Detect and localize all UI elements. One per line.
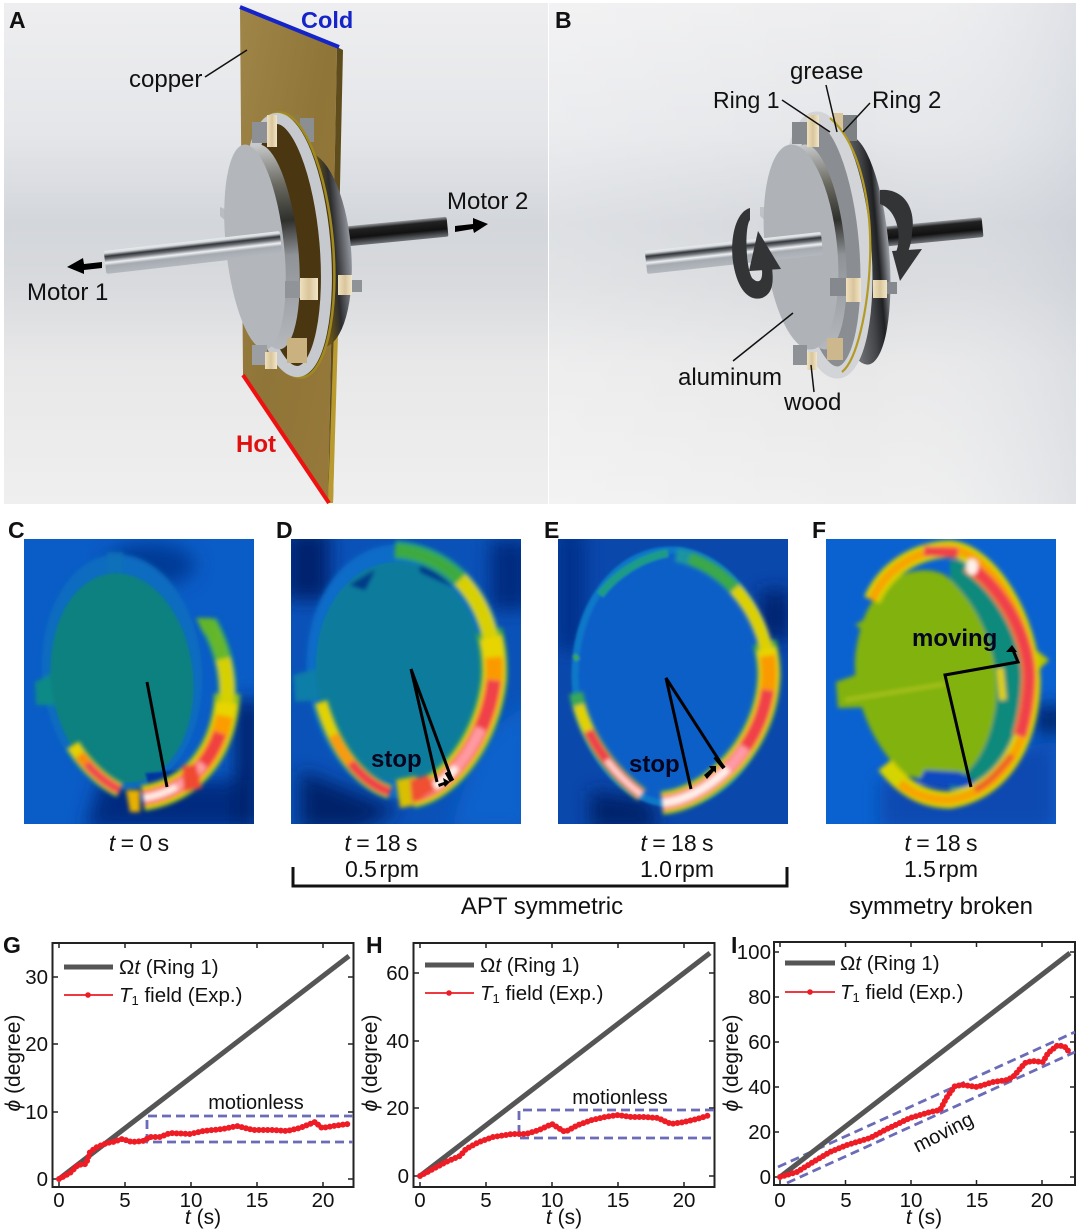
legend xyxy=(785,952,963,1005)
legend: T xyxy=(119,984,133,1007)
legend: Ωt (Ring 1) xyxy=(840,952,940,975)
plot frame and ticks xyxy=(774,942,1075,1185)
x axis tick labels: 5 xyxy=(840,1189,852,1212)
x axis tick labels xyxy=(414,1189,695,1212)
label: Ring 1 xyxy=(713,87,830,132)
angle lines xyxy=(411,669,452,782)
caption D xyxy=(344,830,419,882)
red hot edge xyxy=(243,375,329,503)
x axis tick labels: 20 xyxy=(673,1189,695,1212)
right rotation arrow xyxy=(880,190,922,281)
label: Cold: Cold xyxy=(301,7,353,33)
legend xyxy=(64,956,242,1008)
y axis tick labels xyxy=(25,966,48,1191)
label: Ring 2: Ring 2 xyxy=(872,87,941,114)
shaft to Motor 2 xyxy=(339,217,448,247)
copper plate xyxy=(240,7,343,503)
panel C: thermal image t=0 xyxy=(24,539,260,830)
y axis tick labels: 40 xyxy=(748,1076,771,1099)
ring and disk assembly xyxy=(754,109,899,381)
label: grease xyxy=(790,58,863,132)
ring and disk assembly xyxy=(215,109,362,381)
legend: field (Exp.) xyxy=(860,981,963,1004)
x axis tick labels: 5 xyxy=(119,1189,131,1212)
label: moving: moving xyxy=(910,1108,977,1157)
legend: 1 xyxy=(853,990,860,1005)
label: copper: copper xyxy=(129,66,202,93)
shaft right xyxy=(879,217,983,247)
dashed motionless box xyxy=(147,1116,353,1142)
label: aluminum xyxy=(678,313,793,391)
panel letter C: C xyxy=(8,517,25,543)
plot frame and ticks xyxy=(414,943,714,1187)
label: Hot: Hot xyxy=(236,431,276,458)
arrow to Motor 2 xyxy=(455,218,488,233)
bracket: APT symmetric range xyxy=(293,867,787,886)
shaft left xyxy=(645,232,823,274)
x axis tick labels: 10 xyxy=(900,1189,922,1212)
y axis tick labels: 0 xyxy=(398,1165,409,1188)
x axis tick labels: 0 xyxy=(414,1189,426,1212)
plot frame and ticks xyxy=(52,943,354,1187)
label: symmetry broken: symmetry broken xyxy=(849,893,1033,920)
caption E: 1.0 rpm xyxy=(640,856,714,882)
label: APT symmetric: APT symmetric xyxy=(461,893,623,920)
y axis tick labels xyxy=(386,962,409,1188)
panel letter G: G xyxy=(3,932,21,958)
x axis tick labels: 0 xyxy=(53,1189,65,1212)
x axis tick labels xyxy=(53,1189,334,1212)
label: moving: moving xyxy=(912,625,997,652)
legend: Ωt (Ring 1) xyxy=(480,954,580,977)
arrow to Motor 1 xyxy=(67,258,102,274)
x axis title: t (s) xyxy=(906,1206,942,1229)
angle line xyxy=(147,682,167,787)
legend: Ωt (Ring 1) xyxy=(119,956,219,979)
caption D: t = 18 s xyxy=(344,830,418,856)
y axis tick labels: 30 xyxy=(25,966,48,989)
x axis tick labels: 0 xyxy=(774,1189,786,1212)
x axis tick labels: 15 xyxy=(966,1189,988,1212)
panel B: rotation render xyxy=(549,3,1076,504)
x axis tick labels: 10 xyxy=(180,1189,202,1212)
blue cold edge xyxy=(240,7,339,47)
panel letter F: F xyxy=(812,517,826,543)
panel letter D: D xyxy=(276,517,293,543)
legend: T xyxy=(480,982,494,1005)
caption F: 1.5 rpm xyxy=(904,856,978,882)
panel A: apparatus render xyxy=(4,3,548,504)
x axis title: t (s) xyxy=(185,1206,221,1229)
y axis tick labels: 80 xyxy=(748,986,771,1009)
y axis title: ϕ (degree) xyxy=(2,1015,25,1111)
legend: field (Exp.) xyxy=(500,982,603,1005)
x axis tick labels: 15 xyxy=(246,1189,268,1212)
y axis tick labels: 40 xyxy=(386,1030,409,1053)
panel letter B: B xyxy=(555,7,572,33)
label: aluminum: aluminum xyxy=(678,364,782,391)
y axis tick labels: 60 xyxy=(386,962,409,985)
label: motionless: motionless xyxy=(572,1087,668,1109)
y axis title: ϕ (degree) xyxy=(359,1015,382,1111)
label: Ring 2 xyxy=(843,87,941,132)
label: Ring 1: Ring 1 xyxy=(713,87,779,113)
x axis tick labels: 5 xyxy=(480,1189,492,1212)
panel F: thermal image 1.5 rpm xyxy=(826,539,1065,830)
chart I xyxy=(720,932,1075,1229)
panel E: thermal image 1.0 rpm xyxy=(555,530,790,830)
caption D: 0.5 rpm xyxy=(345,856,419,882)
red data: T1 field xyxy=(59,1122,348,1179)
y axis tick labels: 0 xyxy=(760,1166,771,1189)
legend: 1 xyxy=(132,993,139,1008)
caption E xyxy=(640,830,714,882)
label: copper xyxy=(129,50,247,93)
shaft to Motor 1 xyxy=(104,231,282,274)
y axis tick labels xyxy=(737,941,771,1189)
y axis tick labels: 0 xyxy=(37,1168,48,1191)
y axis tick labels: 20 xyxy=(386,1097,409,1120)
chart G xyxy=(2,932,354,1229)
panel letter H: H xyxy=(366,932,383,958)
panel letter I: I xyxy=(731,932,737,958)
red data: T1 field xyxy=(780,1045,1070,1177)
gray line: ring 1 xyxy=(420,953,710,1176)
caption F xyxy=(904,830,978,882)
angle lines xyxy=(666,678,724,789)
y axis tick labels: 20 xyxy=(25,1033,48,1056)
legend: 1 xyxy=(493,991,500,1006)
x axis tick labels: 10 xyxy=(541,1189,563,1212)
chart H xyxy=(359,932,714,1229)
x axis title: t (s) xyxy=(546,1206,582,1229)
panel letter E: E xyxy=(544,517,559,543)
caption C: t = 0 s xyxy=(109,830,169,856)
x axis tick labels xyxy=(774,1189,1053,1212)
x axis tick labels: 15 xyxy=(607,1189,629,1212)
dashed moving band xyxy=(778,1032,1075,1183)
label: motionless: motionless xyxy=(208,1092,304,1114)
dashed motionless box xyxy=(519,1110,714,1138)
x axis tick labels: 20 xyxy=(312,1189,334,1212)
label: stop: stop xyxy=(371,746,422,773)
gray line: ring 1 xyxy=(59,956,349,1179)
y axis title: ϕ (degree) xyxy=(720,1015,743,1111)
label: Motor 2: Motor 2 xyxy=(447,188,528,215)
y axis tick labels: 10 xyxy=(25,1101,48,1124)
legend: field (Exp.) xyxy=(139,984,242,1007)
panel D: thermal image 0.5 rpm xyxy=(291,539,521,824)
label: wood: wood xyxy=(783,389,841,416)
caption F: t = 18 s xyxy=(904,830,978,856)
y axis tick labels: 60 xyxy=(748,1031,771,1054)
angle lines xyxy=(945,650,1018,787)
label: Motor 1: Motor 1 xyxy=(27,279,108,306)
label: grease: grease xyxy=(790,58,863,85)
legend xyxy=(425,954,603,1006)
left rotation arrow xyxy=(732,208,781,299)
gray line: ring 1 xyxy=(780,953,1070,1177)
label: wood xyxy=(783,365,841,416)
caption E: t = 18 s xyxy=(640,830,714,856)
x axis tick labels: 20 xyxy=(1031,1189,1053,1212)
label: panel letter A: A xyxy=(9,7,26,33)
legend: T xyxy=(840,981,854,1004)
red data: T1 field xyxy=(420,1115,710,1176)
label: stop: stop xyxy=(629,751,680,778)
y axis tick labels: 20 xyxy=(748,1121,771,1144)
y axis tick labels: 100 xyxy=(737,941,771,964)
